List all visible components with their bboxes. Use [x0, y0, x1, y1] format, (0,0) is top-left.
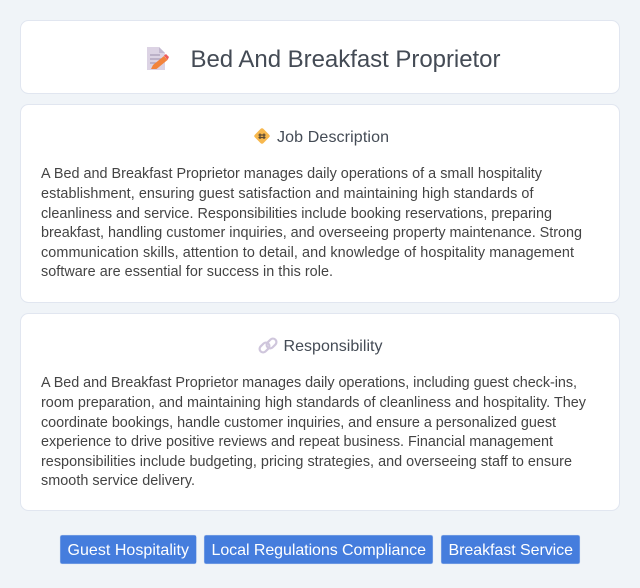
tag: local regulations compliance: Local Regulations Compliance: [212, 542, 426, 559]
text block: job description: A Bed and Breakfast Proprietor manages daily operations of a small hospitality: [41, 166, 543, 182]
text block: job description: [41, 166, 582, 280]
icon: chain link: [258, 337, 278, 354]
text block: job description: cleanliness and service. Responsibilities include booking reservations, preparing: [41, 206, 552, 222]
tag: guest hospitality: Guest Hospitality: [68, 542, 189, 559]
heading: job description: Job Description: [277, 129, 389, 146]
text block: job description: software are essential for success in this role.: [41, 264, 333, 280]
panel: job description: [20, 104, 620, 302]
text block: job description: communication skills, attention to detail, and knowledge of hospitality management: [41, 245, 574, 261]
panel: title: [20, 20, 620, 94]
tag: local regulations compliance: [204, 535, 433, 564]
text block: responsibility: [41, 375, 587, 489]
tag: breakfast service: [441, 535, 580, 564]
text block: responsibility: A Bed and Breakfast Proprietor manages daily operations, including guest check-ins,: [41, 375, 577, 391]
icon: construction diamond: [254, 128, 270, 144]
text block: responsibility: smooth service delivery.: [41, 473, 195, 489]
tag: breakfast service: Breakfast Service: [448, 542, 573, 559]
text block: job description: establishment, ensuring guest satisfaction and maintaining high standards of: [41, 186, 534, 202]
icon: memo with pencil: [147, 47, 169, 70]
text block: responsibility: room preparation, and maintaining high standards of cleanliness and hospitality. They: [41, 395, 587, 411]
tag: guest hospitality: [60, 535, 196, 564]
text block: responsibility: coordinate bookings, handle customer inquiries, and ensure a personalized guest: [41, 415, 556, 431]
text block: responsibility: experience to drive positive reviews and repeat business. Financial management: [41, 434, 553, 450]
heading: Bed And Breakfast Proprietor: [190, 46, 500, 73]
panel: responsibility: [20, 314, 620, 510]
heading: responsibility: Responsibility: [284, 338, 382, 355]
text block: job description: breakfast, handling customer inquiries, and overseeing property maintenance. Strong: [41, 225, 582, 241]
text block: responsibility: responsibilities include budgeting, pricing strategies, and overseeing staff to ensure: [41, 454, 572, 470]
